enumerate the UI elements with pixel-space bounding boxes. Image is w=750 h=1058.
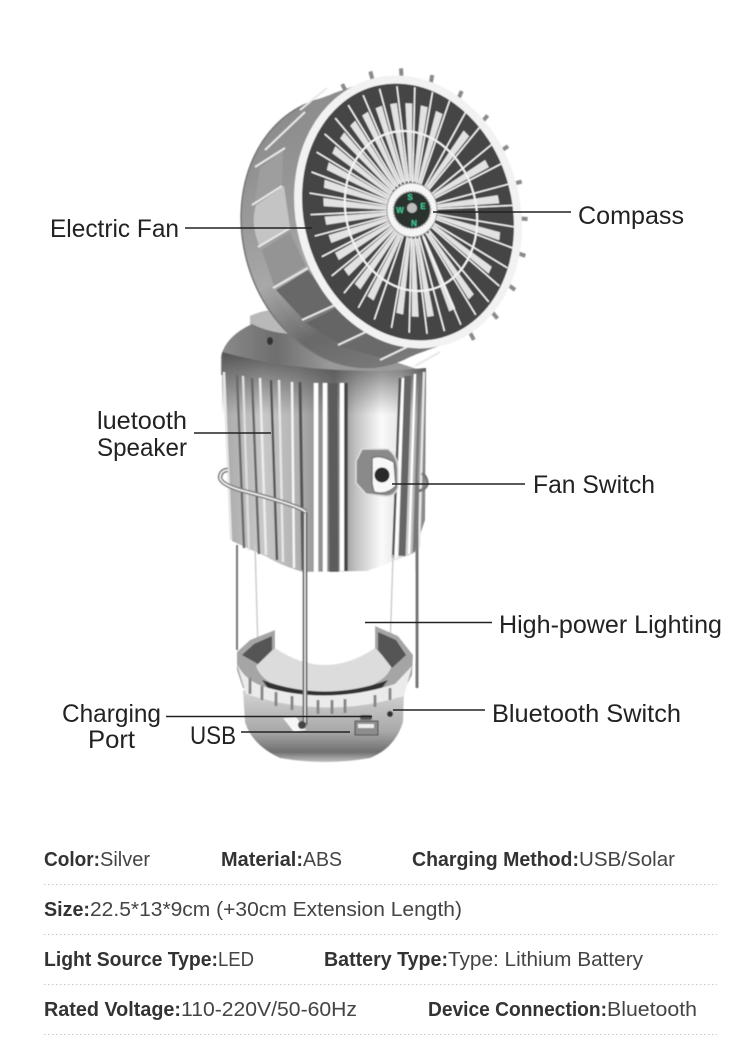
- spec row: voltage, connection: Bluetooth: [607, 998, 697, 1021]
- spec row: voltage, connection: Device Connection:: [428, 998, 607, 1021]
- spec row: color, material, charging method: Silver: [100, 848, 150, 871]
- grille spokes: [282, 63, 542, 357]
- spec row: color, material, charging method: Color:: [44, 848, 100, 871]
- spec row: size: Size:: [44, 898, 90, 921]
- fan grille: [269, 41, 558, 370]
- speaker ribs: [224, 372, 424, 572]
- spec row: light source, battery type: Battery Type:: [324, 948, 448, 971]
- spec row: color, material, charging method: USB/Solar: [579, 848, 675, 871]
- spec row: voltage, connection: 110-220V/50-60Hz: [181, 998, 357, 1021]
- callout: Bluetooth Speaker: Speaker: [97, 434, 187, 462]
- spec row: color, material, charging method: Material:: [221, 848, 303, 871]
- lamp glass and light tube: [240, 545, 415, 662]
- base ports: [283, 711, 393, 735]
- fan mount collar: [221, 310, 426, 380]
- reflector ring: [237, 626, 413, 714]
- spec row: size: 22.5*13*9cm (+30cm Extension Length): [90, 898, 462, 921]
- callout: Fan Switch: Fan Switch: [533, 471, 655, 499]
- callout: Bluetooth Speaker: luetooth: [97, 407, 187, 435]
- spec row: voltage, connection: [44, 998, 717, 1034]
- fan switch: [356, 449, 398, 496]
- callout: USB: USB: [190, 722, 236, 750]
- spec row: voltage, connection: Rated Voltage:: [44, 998, 181, 1021]
- spec row: color, material, charging method: ABS: [303, 848, 342, 871]
- spec row: light source, battery type: [44, 948, 717, 984]
- callout: Compass: Compass: [578, 202, 684, 230]
- spec row: light source, battery type: Light Source Type:: [44, 948, 218, 971]
- callout: Charging Port: Charging: [62, 700, 161, 728]
- lantern illustration: [211, 41, 558, 762]
- callout: Charging Port: Port: [88, 726, 135, 754]
- callout: Electric Fan: Electric Fan: [50, 215, 179, 243]
- spec row: light source, battery type: Type: Lithium Battery: [448, 948, 644, 971]
- spec row: light source, battery type: LED: [218, 948, 254, 971]
- compass: [387, 183, 437, 237]
- callout: Bluetooth Speaker: [97, 407, 271, 462]
- compass: W: [396, 206, 404, 215]
- canister body: Bluetooth speaker housing: [222, 352, 426, 572]
- base bowl: [243, 690, 404, 762]
- spec row: size: [44, 898, 717, 934]
- callout: Charging Port: [62, 700, 372, 754]
- compass: E: [420, 202, 426, 211]
- compass: S: [407, 193, 413, 202]
- callout: Bluetooth Switch: Bluetooth Switch: [492, 700, 681, 728]
- spec row: color, material, charging method: Charging Method:: [412, 848, 579, 871]
- housing ribs: [252, 88, 440, 366]
- fan blades: [300, 83, 524, 337]
- compass: N: [411, 219, 417, 228]
- carrying wires: [220, 470, 427, 725]
- callout: High-power Lighting: High-power Lighting: [499, 611, 722, 639]
- electric fan: [211, 41, 558, 393]
- outer ring teeth: [341, 41, 558, 356]
- spec row: color, material, charging method: [44, 848, 717, 884]
- fan housing band: [211, 56, 537, 393]
- specification table: [44, 848, 717, 1034]
